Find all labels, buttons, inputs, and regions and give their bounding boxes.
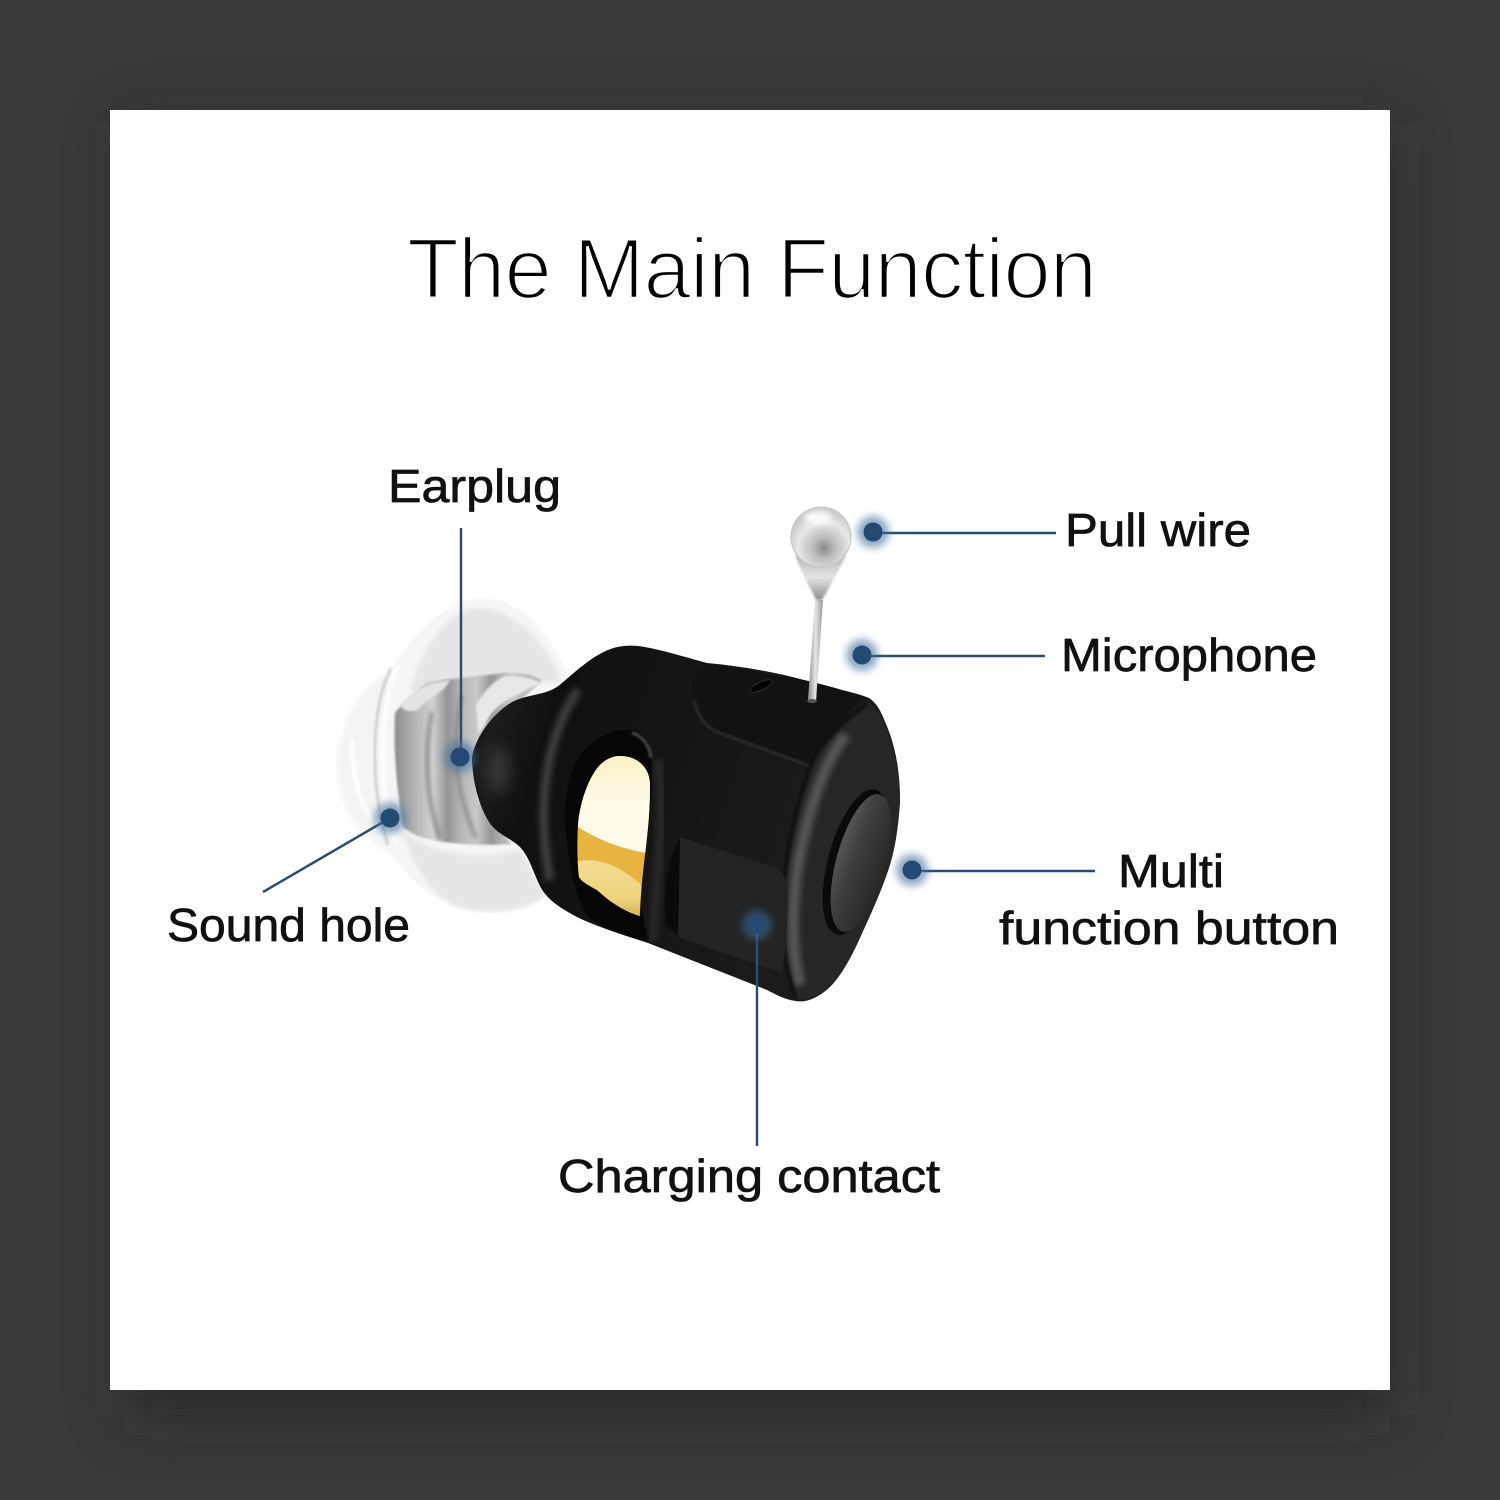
earplug: translucent flanges (337, 598, 569, 913)
charging pad (678, 837, 788, 973)
callout: charging contact: Charging contact (558, 1150, 940, 1202)
callout: earplug: Earplug (388, 460, 561, 512)
callout: sound hole (167, 802, 410, 951)
title: The Main Function (407, 222, 1097, 317)
black body (472, 646, 900, 1001)
callout: sound hole: Sound hole (167, 899, 410, 951)
top ridge bump (692, 664, 866, 764)
callout: multi function button: function button (999, 902, 1339, 954)
callout: charging contact (558, 910, 940, 1202)
callout: earplug (388, 460, 561, 773)
gold window recess (565, 730, 652, 942)
nose highlight (488, 746, 508, 794)
microphone slot (748, 677, 774, 695)
white panel (110, 110, 1390, 1390)
right face rim (782, 702, 900, 999)
multi function button (810, 782, 904, 942)
callout: pull wire: Pull wire (1065, 504, 1251, 556)
body shoulder highlight (544, 690, 578, 880)
callout: microphone: Microphone (1061, 629, 1317, 681)
callout: multi function button (896, 845, 1339, 954)
callout: microphone (846, 629, 1317, 681)
silver stem (394, 673, 541, 845)
hearing aid device (337, 507, 904, 1001)
pull wire (791, 507, 851, 703)
callout: multi function button: Multi (1118, 845, 1224, 897)
callout: pull wire (857, 504, 1251, 556)
panel shadow (125, 125, 1390, 1415)
centre body band (652, 760, 661, 940)
gold contact window (577, 756, 650, 916)
